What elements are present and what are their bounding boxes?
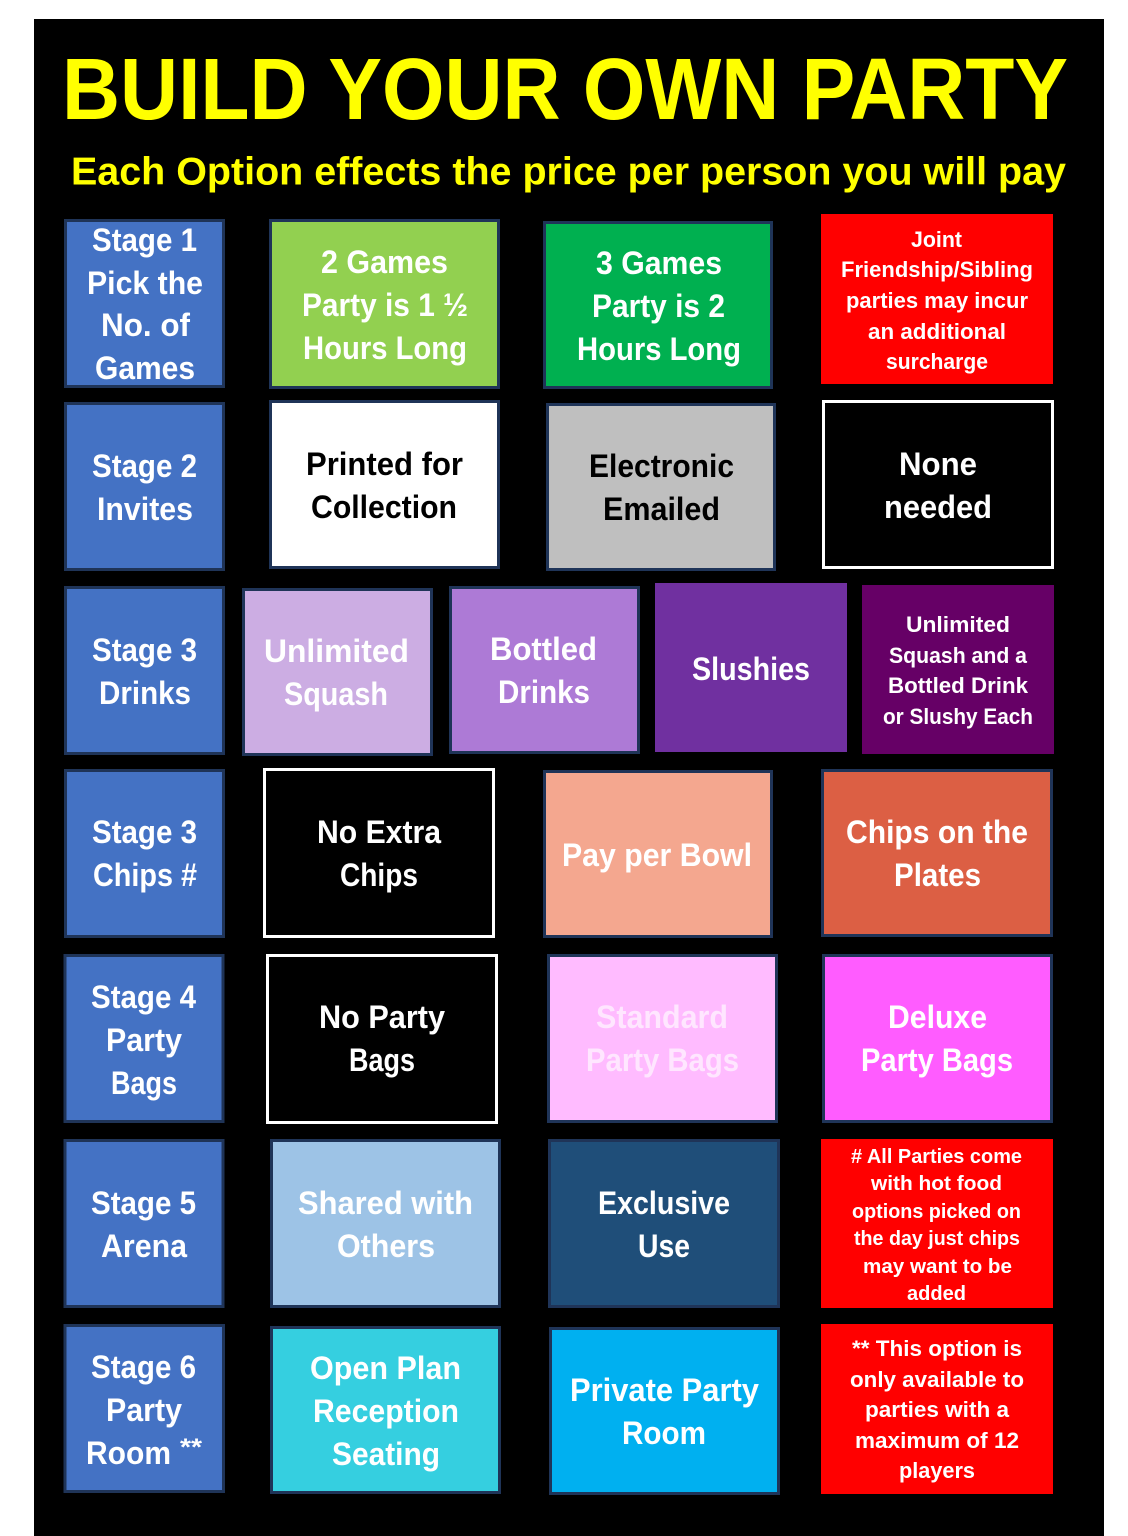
panel: pay per bowl: Pay per Bowl	[562, 837, 752, 873]
callout: joint parties surcharge: an additional	[868, 319, 1006, 344]
panel: private party room: Room	[622, 1415, 706, 1451]
panel: bottled drinks: Drinks	[498, 674, 590, 710]
panel: stage 6 party room	[65, 1326, 224, 1492]
panel: shared arena: Others	[337, 1228, 435, 1264]
panel: stage 6 party room: Party	[106, 1392, 182, 1428]
panel: printed invites	[270, 402, 498, 568]
callout: joint parties surcharge: Joint	[911, 227, 963, 252]
panel: exclusive arena: Exclusive	[598, 1185, 730, 1221]
panel: printed invites: Collection	[311, 489, 457, 525]
panel: no party bags	[268, 956, 496, 1122]
panel: stage 6 party room: **	[180, 1434, 203, 1461]
callout: maximum players note: only available to	[850, 1367, 1024, 1392]
panel: stage 2 invites: Stage 2	[92, 448, 197, 484]
title: BUILD YOUR OWN PARTY	[62, 41, 1068, 138]
panel: standard party bags	[548, 956, 776, 1122]
callout: maximum players note: ** This option is	[852, 1336, 1022, 1361]
panel: 2 games option	[270, 220, 498, 388]
callout: maximum players note: maximum of 12	[855, 1428, 1019, 1453]
panel: stage 1 pick the number of games: Games	[95, 350, 195, 386]
callout: hot food note	[821, 1139, 1053, 1308]
panel: stage 3 drinks	[66, 588, 224, 754]
panel: deluxe party bags: Party Bags	[861, 1042, 1013, 1078]
panel: 2 games option: 2 Games	[321, 244, 448, 280]
panel: stage 3 drinks: Stage 3	[92, 632, 197, 668]
panel: electronic invites: Emailed	[603, 491, 720, 527]
panel: electronic invites	[548, 404, 774, 570]
panel: open plan reception seating: Seating	[332, 1436, 440, 1472]
panel: no extra chips: Chips	[340, 857, 418, 893]
panel: 2 games option: Hours Long	[303, 330, 467, 366]
panel: stage 1 pick the number of games: Stage 1	[92, 222, 197, 258]
panel: stage 2 invites	[66, 404, 224, 570]
panel: shared arena: Shared with	[298, 1185, 473, 1221]
callout: maximum players note: players	[899, 1458, 975, 1483]
panel: no party bags: No Party	[319, 999, 445, 1035]
panel: stage 2 invites: Invites	[97, 491, 193, 527]
panel: unlimited squash and a bottled drink or slushy: Bottled Drink	[888, 673, 1029, 698]
panel: printed invites: Printed for	[306, 446, 463, 482]
panel: bottled drinks	[450, 588, 638, 752]
panel: shared arena	[272, 1140, 500, 1306]
panel: 3 games option: Hours Long	[577, 331, 741, 367]
panel: no invites needed: None	[899, 446, 977, 482]
panel: standard party bags: Standard	[596, 999, 728, 1035]
panel: electronic invites: Electronic	[589, 448, 734, 484]
panel: stage 5 arena: Stage 5	[91, 1185, 196, 1221]
panel: private party room	[550, 1328, 778, 1494]
panel: open plan reception seating: Open Plan	[310, 1350, 461, 1386]
panel: open plan reception seating: Reception	[313, 1393, 459, 1429]
callout: joint parties surcharge: Friendship/Sibling	[841, 257, 1033, 282]
panel: unlimited squash: Unlimited	[264, 633, 409, 669]
panel: standard party bags: Party Bags	[586, 1042, 739, 1078]
panel: no party bags: Bags	[349, 1042, 415, 1078]
panel: pay per bowl	[544, 772, 772, 936]
panel: unlimited squash: Squash	[284, 676, 388, 712]
panel: stage 5 arena	[65, 1140, 223, 1306]
panel: stage 1 pick the number of games: No. of	[101, 307, 190, 343]
panel: no extra chips: No Extra	[317, 814, 441, 850]
subtitle: Each Option effects the price per person you will pay	[71, 150, 1066, 194]
panel: stage 4 party bags	[65, 956, 223, 1122]
panel: 3 games option: 3 Games	[596, 245, 722, 281]
panel: unlimited squash and a bottled drink or slushy: Squash and a	[889, 643, 1028, 668]
callout: joint parties surcharge: surcharge	[886, 349, 988, 374]
panel: chips on the plates: Chips on the	[846, 814, 1028, 850]
panel: stage 3 chips: Stage 3	[92, 814, 197, 850]
panel: slushies	[655, 583, 847, 752]
panel: stage 4 party bags: Party	[106, 1022, 182, 1058]
panel: bottled drinks: Bottled	[490, 631, 597, 667]
panel: 2 games option: Party is 1 ½	[302, 287, 468, 323]
panel: 3 games option: Party is 2	[592, 288, 725, 324]
panel: unlimited squash and a bottled drink or slushy	[862, 585, 1054, 754]
panel: stage 1 pick the number of games: Pick the	[87, 265, 203, 301]
callout: joint parties surcharge: parties may incur	[846, 288, 1028, 313]
panel: stage 4 party bags: Stage 4	[91, 979, 196, 1015]
callout: maximum players note	[821, 1324, 1053, 1494]
callout: hot food note: added	[907, 1283, 966, 1305]
panel: stage 1 pick the number of games	[66, 220, 224, 386]
panel: open plan reception seating	[272, 1328, 500, 1492]
panel: stage 3 drinks: Drinks	[99, 675, 191, 711]
panel: deluxe party bags	[824, 956, 1052, 1122]
panel: stage 5 arena: Arena	[101, 1228, 187, 1264]
panel: stage 6 party room: Room	[86, 1435, 171, 1471]
panel: stage 4 party bags: Bags	[111, 1065, 177, 1101]
panel: stage 3 chips: Chips #	[93, 857, 197, 893]
panel: unlimited squash and a bottled drink or slushy: Unlimited	[906, 612, 1010, 637]
panel: chips on the plates	[822, 770, 1052, 936]
panel: stage 6 party room: Stage 6	[91, 1349, 196, 1385]
panel: private party room: Private Party	[570, 1372, 759, 1408]
panel: 3 games option	[544, 222, 772, 388]
panel: no extra chips	[264, 770, 494, 936]
callout: hot food note: the day just chips	[854, 1228, 1020, 1250]
panel: slushies: Slushies	[692, 651, 810, 687]
callout: hot food note: with hot food	[870, 1173, 1002, 1195]
panel: deluxe party bags: Deluxe	[888, 999, 987, 1035]
panel: chips on the plates: Plates	[894, 857, 981, 893]
callout: joint parties surcharge	[821, 214, 1053, 384]
callout: hot food note: options picked on	[852, 1201, 1021, 1223]
callout: maximum players note: parties with a	[865, 1397, 1010, 1422]
panel: unlimited squash and a bottled drink or slushy: or Slushy Each	[883, 704, 1033, 729]
callout: hot food note: # All Parties come	[851, 1146, 1022, 1168]
callout: hot food note: may want to be	[863, 1256, 1012, 1278]
panel: exclusive arena: Use	[638, 1228, 690, 1264]
panel: no invites needed: needed	[884, 489, 992, 525]
panel: stage 3 chips	[66, 770, 224, 936]
panel: no invites needed	[824, 402, 1052, 568]
panel: unlimited squash	[244, 590, 432, 754]
panel: exclusive arena	[550, 1140, 778, 1306]
